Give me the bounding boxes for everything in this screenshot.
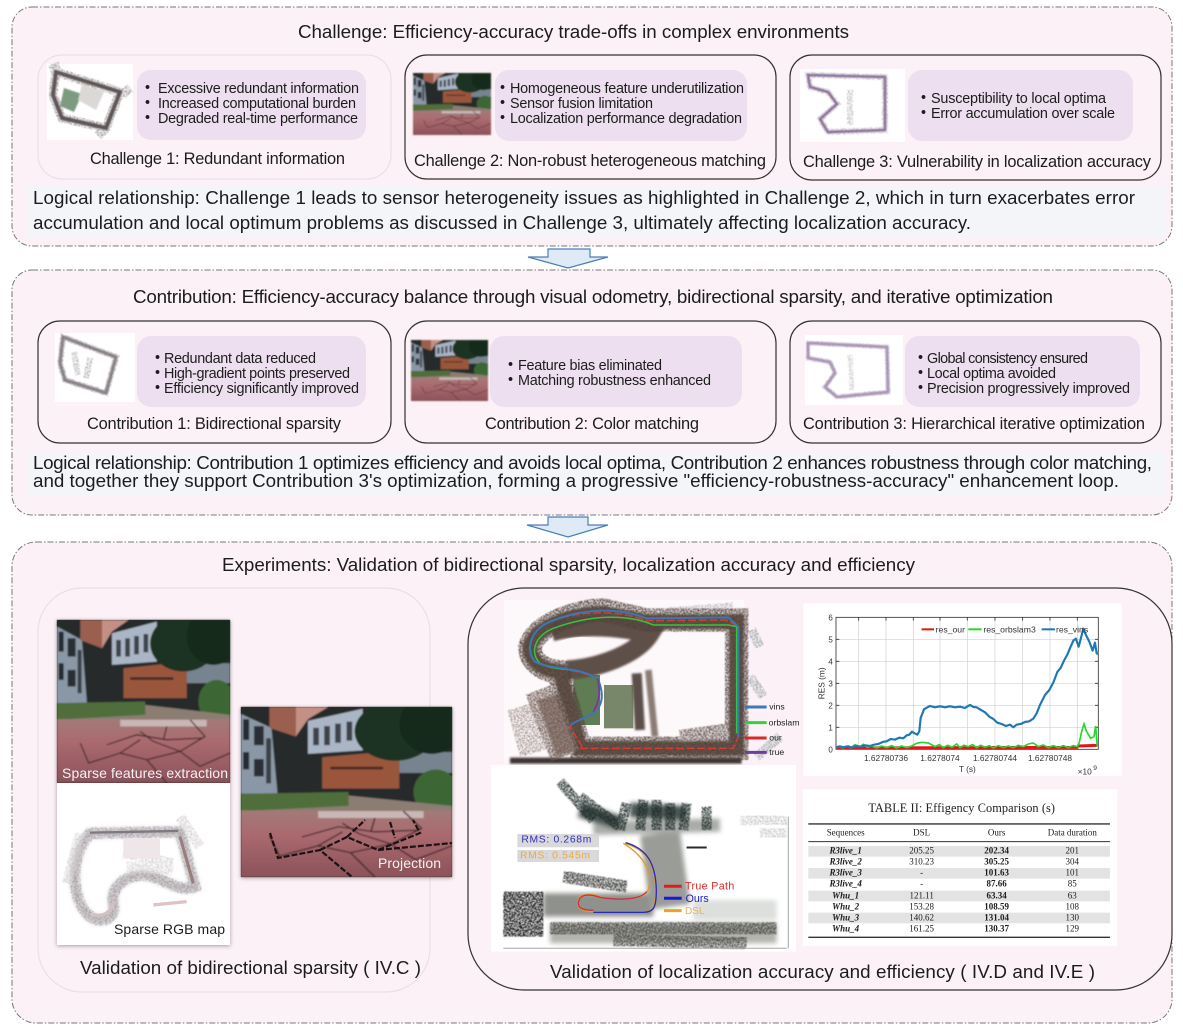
axis labels: residual chart: 1.62780744	[973, 753, 1017, 763]
table body: 201	[1066, 846, 1079, 856]
card: bidirectional sparsity validation	[38, 588, 464, 992]
image: sparse RGB map	[57, 783, 230, 945]
axis labels: residual chart: 4	[828, 657, 833, 666]
axis labels: residual chart: 3	[828, 679, 833, 688]
card: challenge 3	[790, 55, 1161, 180]
bullet list: challenge 1	[137, 70, 366, 140]
bullet list: contribution 3: •	[918, 380, 923, 396]
image: courtyard photo	[413, 69, 496, 135]
axis labels: residual chart: 1.62780748	[1028, 753, 1072, 763]
legend: RMS map: DSL	[685, 906, 705, 917]
caption: contribution 1: Contribution 1: Bidirectional sparsity	[87, 415, 342, 433]
caption: localization accuracy and efficiency validation: Validation of localization accuracy and efficiency ( IV.D and IV.E )	[550, 961, 1095, 982]
heading: contribution: Contribution: Efficiency-accuracy balance through visual odometry, bidirectional sparsity, and iterative optimization	[133, 286, 1053, 307]
table body: Whu_4	[832, 923, 860, 933]
table body: Sequences	[827, 828, 865, 838]
panel: contribution	[12, 270, 1172, 515]
bullet list: contribution 2: Matching robustness enhanced	[518, 373, 711, 389]
bullet list: contribution 2: Feature bias eliminated	[518, 358, 662, 374]
text block: logical relationship of challenges: Logical relationship: Challenge 1 leads to sensor heterogeneity issues as highlighted in Challenge 2, which in turn exacerbates error	[33, 187, 1135, 208]
bullet list: contribution 1: •	[155, 365, 160, 381]
table body: 101	[1066, 868, 1079, 878]
text block: logical relationship of contributions: Logical relationship: Contribution 1 optimizes efficiency and avoids local optima, Contribution 2 enhances robustness through color matching,	[33, 452, 1152, 473]
label: sparse RGB map: Sparse RGB map	[114, 921, 225, 937]
axis labels: residual chart: 1.6278074	[920, 753, 960, 763]
card: contribution 3	[790, 321, 1161, 443]
bullet list: challenge 2	[495, 70, 747, 141]
text block: logical relationship of contributions: and together they support Contribution 3's optimization, forming a progressive "efficiency-robustness-accuracy" enhancement loop.	[33, 470, 1119, 491]
bullet list: contribution 3: •	[918, 365, 923, 381]
text block: logical relationship of contributions	[28, 452, 1165, 496]
table body: 108.59	[984, 901, 1010, 911]
table body: R3live_1	[828, 846, 862, 856]
bullet list: challenge 2: Sensor fusion limitation	[510, 96, 653, 112]
heading: challenge: Challenge: Efficiency-accuracy trade-offs in complex environments	[298, 21, 849, 42]
axis labels: residual chart: 9	[1093, 765, 1097, 772]
bullet list: challenge 1: •	[145, 110, 150, 126]
label: RMS values: RMS: 0.268m	[521, 835, 591, 846]
legend: trajectory map: orbslam	[769, 717, 799, 727]
table body: 121.11	[909, 890, 934, 900]
bullet list: challenge 3: •	[921, 105, 926, 121]
table body: 85	[1068, 879, 1077, 889]
axis labels: residual chart	[816, 613, 1097, 777]
panel: experiments	[12, 542, 1172, 1023]
heading: experiments: Experiments: Validation of bidirectional sparsity, localization accuracy and efficiency	[222, 554, 916, 575]
card: challenge 1	[38, 55, 391, 179]
bullet list: contribution 1: •	[155, 380, 160, 396]
table body: 205.25	[909, 846, 935, 856]
caption: contribution 3: Contribution 3: Hierarchical iterative optimization	[803, 415, 1145, 433]
caption: contribution 2: Contribution 2: Color matching	[485, 415, 699, 433]
table body: Data duration	[1048, 828, 1097, 838]
bullet list: contribution 3: Precision progressively improved	[927, 381, 1130, 397]
bullet list: contribution 3	[905, 336, 1140, 407]
bullet list: contribution 1: High-gradient points preserved	[164, 366, 350, 382]
bullet list: challenge 3: Susceptibility to local optima	[931, 91, 1106, 107]
table body: 129	[1066, 923, 1080, 933]
legend: trajectory map: vins	[769, 702, 785, 712]
caption: challenge 1: Challenge 1: Redundant information	[90, 150, 345, 168]
bullet list: challenge 2: •	[500, 110, 505, 126]
legend: trajectory map: our	[769, 733, 782, 743]
image: courtyard photo	[411, 336, 492, 401]
map: trajectory comparison	[504, 600, 799, 763]
legend: residual chart: res_our	[936, 624, 965, 634]
bullet list: challenge 2: •	[500, 80, 505, 96]
axis labels: residual chart: 2	[828, 701, 833, 710]
chart: localization residual over time	[803, 603, 1122, 777]
axis labels: residual chart: 1	[828, 723, 833, 732]
card: contribution 1	[38, 321, 391, 443]
table body: 130	[1066, 913, 1080, 923]
axis labels: residual chart: 5	[828, 635, 833, 644]
card: localization accuracy and efficiency validation	[468, 588, 1172, 990]
table body: 304	[1066, 857, 1080, 867]
icon: optimized map thumbnail	[805, 335, 903, 405]
line: res_vins	[836, 629, 1098, 748]
table body: 310.23	[909, 857, 935, 867]
caption: challenge 2: Challenge 2: Non-robust heterogeneous matching	[414, 152, 766, 170]
table body: 130.37	[984, 923, 1010, 933]
table body: R3live_4	[828, 879, 862, 889]
axis labels: residual chart: 1.62780736	[864, 753, 908, 763]
caption: challenge 3: Challenge 3: Vulnerability in localization accuracy	[803, 153, 1152, 171]
bullet list: challenge 1: Excessive redundant information	[158, 81, 359, 97]
bullet list: challenge 2: •	[500, 95, 505, 111]
bullet list: contribution 2: •	[508, 357, 513, 373]
axis labels: residual chart: 0	[828, 745, 833, 754]
bullet list: contribution 3: •	[918, 350, 923, 366]
table body: 202.34	[984, 846, 1010, 856]
label: RMS values	[520, 835, 591, 861]
bullet list: contribution 2: •	[508, 372, 513, 388]
legend: residual chart	[922, 624, 1089, 634]
table body: Whu_1	[832, 890, 859, 900]
bullet list: challenge 2: Localization performance degradation	[510, 111, 742, 127]
bullet list: challenge 3	[908, 70, 1133, 141]
image: sparse features extraction	[57, 608, 240, 783]
icon: dense map thumbnail	[47, 64, 133, 140]
table body: 63.34	[987, 890, 1007, 900]
bullet list: contribution 2	[490, 336, 742, 407]
legend: RMS map	[664, 881, 734, 917]
caption: bidirectional sparsity validation: Validation of bidirectional sparsity ( IV.C )	[80, 957, 421, 978]
bullet list: challenge 1: •	[145, 95, 150, 111]
label: RMS values: RMS: 0.545m	[520, 850, 590, 861]
text block: logical relationship of challenges	[28, 186, 1165, 238]
table title: TABLE II: Effigency Comparison (s)	[868, 801, 1055, 815]
legend: RMS map: Ours	[686, 893, 709, 905]
legend: trajectory map	[745, 702, 799, 757]
bullet list: challenge 1: Increased computational burden	[158, 96, 356, 112]
table body: Whu_3	[832, 913, 860, 923]
card: contribution 2	[405, 321, 776, 443]
card: challenge 2	[405, 55, 776, 179]
legend: residual chart: res_orbslam3	[983, 624, 1036, 634]
icon: sparse map thumbnail	[55, 333, 135, 402]
line: res_our	[836, 745, 1097, 748]
label: projection: Projection	[378, 855, 441, 871]
table body: 161.25	[909, 923, 935, 933]
axis labels: residual chart: RES (m)	[816, 667, 826, 699]
bullet list: challenge 2: Homogeneous feature underutilization	[510, 81, 744, 97]
table body: 131.04	[984, 913, 1010, 923]
arrow: contribution to experiments	[527, 517, 608, 537]
table body: 87.66	[987, 879, 1007, 889]
bullet list: contribution 1	[137, 336, 366, 407]
panel: challenge	[12, 7, 1172, 246]
table body: R3live_3	[828, 868, 862, 878]
table body: 153.28	[909, 901, 935, 911]
legend: trajectory map: true	[769, 747, 784, 757]
axis labels: residual chart: ×10	[1078, 767, 1092, 777]
legend: RMS map: True Path	[685, 881, 734, 893]
table body	[827, 828, 1097, 933]
axis labels: residual chart: 6	[828, 613, 833, 622]
bullet list: contribution 1: •	[155, 350, 160, 366]
table body: -	[920, 868, 923, 878]
table: efficiency comparison	[803, 789, 1117, 946]
table body: Whu_2	[832, 901, 860, 911]
bullet list: contribution 3: Global consistency ensured	[927, 351, 1088, 367]
table body: R3live_2	[828, 857, 862, 867]
label: sparse features extraction: Sparse features extraction	[62, 765, 228, 781]
image: projection	[241, 695, 464, 877]
axis labels: residual chart: T (s)	[959, 764, 976, 774]
table body: -	[920, 879, 923, 889]
arrow: challenge to contribution	[528, 249, 608, 268]
table body: DSL	[913, 828, 930, 838]
table body: 305.25	[984, 857, 1010, 867]
bullet list: contribution 3: Local optima avoided	[927, 366, 1056, 382]
line: res_orbslam3	[836, 724, 1097, 748]
bullet list: contribution 1: Efficiency significantly improved	[164, 381, 359, 397]
icon: trajectory map thumbnail	[800, 69, 905, 142]
table body: 63	[1068, 890, 1077, 900]
legend: residual chart: res_vins	[1056, 624, 1089, 634]
map: RMS trajectory comparison	[491, 765, 796, 952]
text block: logical relationship of challenges: accumulation and local optimum problems as discussed in Challenge 3, ultimately affecting localization accuracy.	[33, 212, 971, 233]
table body: 101.63	[984, 868, 1010, 878]
table body: Ours	[988, 828, 1006, 838]
bullet list: challenge 1: Degraded real-time performance	[158, 111, 358, 127]
table body: 140.62	[909, 913, 934, 923]
table body: 108	[1066, 901, 1080, 911]
bullet list: challenge 3: •	[921, 90, 926, 106]
bullet list: challenge 3: Error accumulation over scale	[931, 106, 1115, 122]
bullet list: challenge 1: •	[145, 80, 150, 96]
bullet list: contribution 1: Redundant data reduced	[164, 351, 316, 367]
